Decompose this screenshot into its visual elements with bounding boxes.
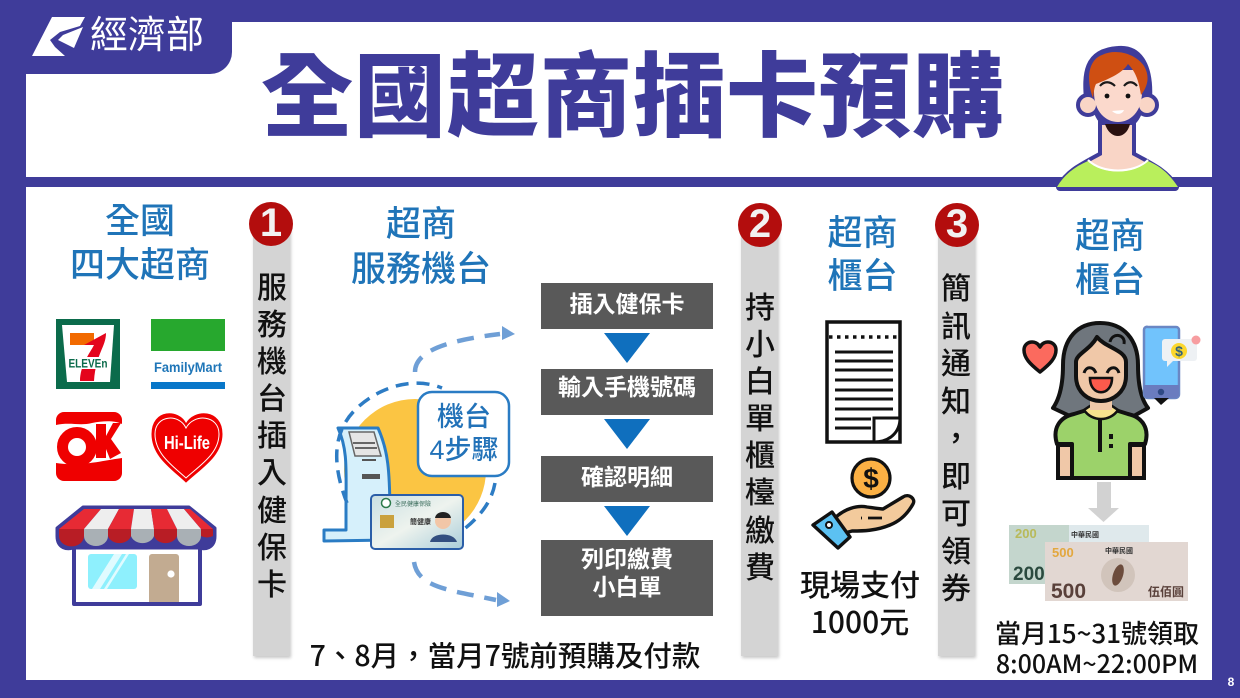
column heading: counter bbox=[827, 214, 898, 296]
voucher 500: 中華民國 bbox=[1105, 546, 1133, 555]
column heading: counter pickup bbox=[1075, 217, 1145, 300]
step 2 text: 單 bbox=[745, 403, 775, 436]
step 2 text: 櫃 bbox=[745, 440, 775, 473]
step 3 text: 簡 bbox=[941, 273, 971, 306]
arms bbox=[1058, 445, 1144, 478]
step 1 text bbox=[257, 272, 287, 602]
arrow down bbox=[604, 419, 650, 449]
page number: 8 bbox=[1228, 675, 1234, 689]
dashed ring bbox=[337, 383, 442, 503]
step 1 text: 卡 bbox=[257, 569, 287, 602]
step 3 text: 券 bbox=[941, 573, 971, 606]
number badge 1: 1 bbox=[260, 201, 282, 245]
step 2 text: 費 bbox=[745, 552, 775, 585]
panel: content bbox=[26, 187, 1212, 680]
heading: stores: 四大超商 bbox=[70, 246, 210, 285]
column heading: counter pickup: 櫃台 bbox=[1075, 261, 1145, 300]
step: print slip: 列印繳費 bbox=[581, 546, 673, 572]
column heading: kiosk: 超商 bbox=[386, 205, 456, 244]
shirt bbox=[1056, 409, 1146, 478]
voucher 200 bbox=[1009, 525, 1149, 585]
number badge 2 bbox=[738, 203, 782, 247]
voucher 500: 500 bbox=[1051, 580, 1086, 603]
step 3 text: 訊 bbox=[941, 310, 971, 344]
step 3 text: ， bbox=[941, 423, 971, 456]
number badge 1 bbox=[249, 202, 293, 246]
voucher 500 bbox=[1045, 542, 1188, 603]
illustration: vouchers bbox=[1009, 525, 1188, 603]
step count callout bbox=[418, 392, 509, 476]
note: preorder deadline: 7、8月，當月7號前預購及付款 bbox=[310, 634, 700, 675]
illustration: smiling woman with phone: $ bbox=[1175, 343, 1183, 359]
step 3 text bbox=[941, 273, 971, 606]
logo: FamilyMart bbox=[151, 319, 225, 389]
step: enter phone: 輸入手機號碼 bbox=[558, 374, 696, 400]
step: print slip: 小白單 bbox=[592, 574, 662, 600]
logo text: 經濟部 bbox=[90, 15, 204, 57]
step 3 text: 領 bbox=[941, 536, 971, 568]
illustration: kiosk and health card: 4步驟 bbox=[429, 435, 499, 465]
step: enter phone bbox=[541, 369, 713, 415]
icon: man avatar bbox=[1056, 46, 1179, 191]
heart bbox=[1024, 342, 1056, 372]
step: confirm: 確認明細 bbox=[581, 464, 673, 490]
step: print slip bbox=[541, 540, 713, 616]
panel: header bbox=[26, 22, 1212, 177]
logo tab: ministry of economic affairs bbox=[0, 0, 232, 74]
text: pay on site: 1000元 bbox=[811, 598, 909, 642]
step 1 text: 插 bbox=[257, 420, 287, 453]
arrow down bbox=[604, 333, 650, 363]
step 2 text: 白 bbox=[745, 366, 775, 399]
decorative sun bbox=[344, 399, 486, 541]
title: 全國超商插卡預購 bbox=[261, 47, 1005, 149]
neck bbox=[1090, 396, 1112, 410]
flow: kiosk steps bbox=[541, 283, 713, 616]
logo: 7-Eleven: ELEVEn bbox=[68, 356, 108, 370]
hair bbox=[1053, 323, 1148, 417]
step: insert card: 插入健保卡 bbox=[570, 291, 684, 317]
step 1 text: 入 bbox=[257, 457, 287, 490]
icon: hand with coin: $ bbox=[863, 463, 879, 494]
step 2 text: 小 bbox=[745, 329, 775, 362]
step 2 text: 持 bbox=[745, 292, 775, 325]
voucher 200: 200 bbox=[1015, 526, 1037, 541]
arrow: down to vouchers bbox=[1088, 482, 1119, 522]
step 3 text: 可 bbox=[941, 498, 971, 531]
voucher 500: 伍佰圓 bbox=[1148, 584, 1184, 599]
illustration: smiling woman with phone bbox=[1022, 321, 1200, 480]
logo: 7-Eleven bbox=[56, 319, 120, 389]
step 3 text: 通 bbox=[941, 348, 971, 381]
illustration: kiosk and health card: 機台 bbox=[437, 402, 491, 432]
icon: store front bbox=[56, 506, 216, 606]
step: confirm bbox=[541, 456, 713, 502]
column: four convenience stores bbox=[56, 202, 225, 606]
heading: stores bbox=[70, 202, 210, 285]
step 2 text bbox=[745, 292, 775, 585]
step 2 bar bbox=[741, 228, 778, 656]
logo: FamilyMart: FamilyMart bbox=[154, 359, 222, 375]
number badge 3: 3 bbox=[946, 202, 968, 246]
text: pay on site: 現場支付 bbox=[800, 561, 920, 605]
step 1 text: 機 bbox=[257, 346, 287, 379]
step 1 text: 台 bbox=[257, 383, 287, 416]
step 2 text: 繳 bbox=[745, 515, 775, 548]
text: pickup time: 當月15~31號領取 bbox=[995, 614, 1199, 651]
number badge 3 bbox=[935, 203, 979, 247]
column heading: counter pickup: 超商 bbox=[1075, 217, 1145, 256]
step 1 text: 服 bbox=[257, 272, 287, 305]
number badge 2: 2 bbox=[749, 202, 771, 246]
logo: Hi-Life bbox=[152, 413, 222, 483]
column heading: kiosk: 服務機台 bbox=[351, 250, 491, 289]
step 1 text: 保 bbox=[257, 532, 287, 565]
face bbox=[1076, 337, 1126, 401]
phone bbox=[1144, 327, 1179, 398]
column heading: counter: 超商 bbox=[827, 214, 898, 253]
step 3 text: 知 bbox=[941, 386, 971, 418]
text: pay on site bbox=[800, 561, 920, 642]
voucher 200: 中華民國 bbox=[1071, 530, 1099, 539]
step 1 text: 健 bbox=[257, 495, 287, 528]
icon: ministry logo bbox=[32, 17, 85, 56]
voucher 500: 500 bbox=[1052, 545, 1074, 560]
illustration: kiosk and health card: 簡健康 bbox=[410, 517, 431, 526]
arrow down bbox=[604, 506, 650, 536]
step 3 bar bbox=[938, 228, 975, 656]
column heading: kiosk bbox=[351, 205, 491, 289]
logo: OK bbox=[56, 412, 122, 481]
heading: stores: 全國 bbox=[105, 202, 175, 241]
voucher 200: 200 bbox=[1013, 564, 1045, 585]
step 1 text: 務 bbox=[257, 309, 287, 342]
illustration: kiosk and health card: 全民健康保險 bbox=[395, 500, 431, 508]
logo: Hi-Life: Hi-Life bbox=[164, 433, 210, 453]
step 2 text: 檯 bbox=[745, 477, 775, 510]
step 3 text: 即 bbox=[941, 460, 971, 494]
step: insert card bbox=[541, 283, 713, 329]
illustration: kiosk and health card bbox=[322, 326, 515, 607]
kiosk bbox=[324, 428, 390, 541]
icon: receipt bbox=[825, 320, 902, 444]
column heading: counter: 櫃台 bbox=[827, 257, 898, 296]
text: pickup time: 8:00AM~22:00PM bbox=[996, 644, 1198, 680]
text: pickup time bbox=[995, 614, 1199, 680]
step 1 bar bbox=[253, 228, 290, 656]
icon: hand with coin bbox=[811, 457, 916, 550]
